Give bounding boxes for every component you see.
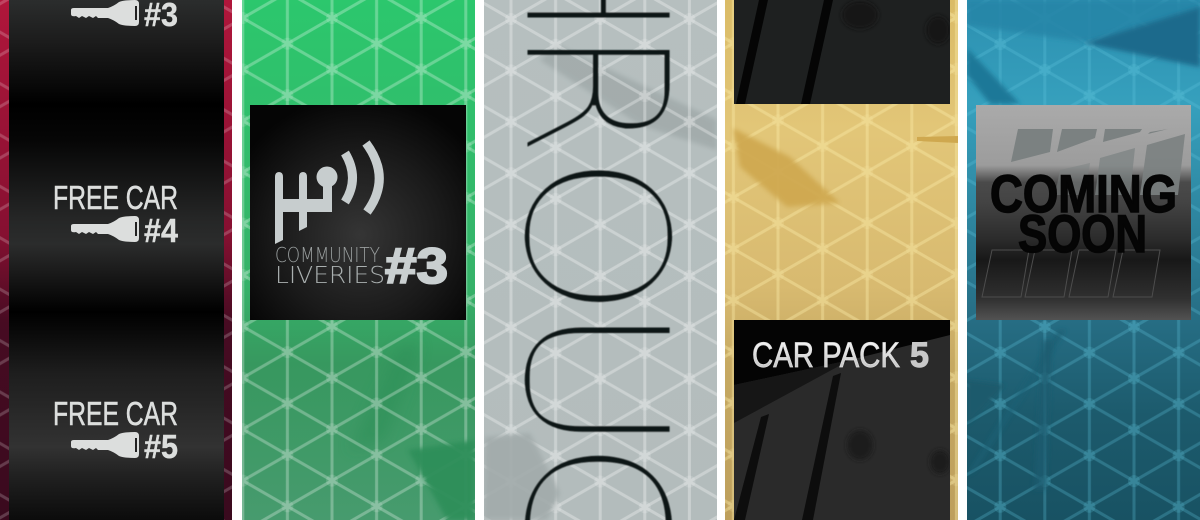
text: car pack: CAR PACK [752,336,900,375]
text: community: COMMUNITY [275,243,380,267]
label: #5: #5 [144,428,178,465]
text: rotated giant word: O [478,150,710,322]
panel: coming soon (blue) [967,0,1200,520]
icon: faded roman numeral stripes [982,129,1185,297]
icon: key #3 [71,0,139,26]
text: #3: #3 [385,238,448,294]
black free car column [9,0,224,520]
label: #4: #4 [144,212,179,249]
icon: key #4 [71,216,139,242]
card: car pack 5 [734,320,950,520]
text: rotated giant word: U [479,301,710,458]
label: free car 5: FREE CAR [53,396,178,433]
panel: car pack 5 (gold) [725,0,958,520]
icon: key #5 [71,432,139,458]
card: top dark image [734,0,950,104]
label: free car 4: FREE CAR [53,180,178,217]
icon: gear shifter with signal waves [275,143,379,244]
text: 5: 5 [910,336,929,375]
panel: rotated word (silver) [478,0,717,520]
text: rotated giant word: R [479,23,711,161]
card: community liveries #3 [250,105,466,320]
panel: free cars (red) [0,0,232,520]
text: liveries: LIVERIES [275,263,385,289]
text: soon: SOON [1018,205,1147,264]
panel: community liveries (green) [242,0,475,520]
card: coming soon [976,105,1191,320]
text: rotated giant word [524,0,673,520]
